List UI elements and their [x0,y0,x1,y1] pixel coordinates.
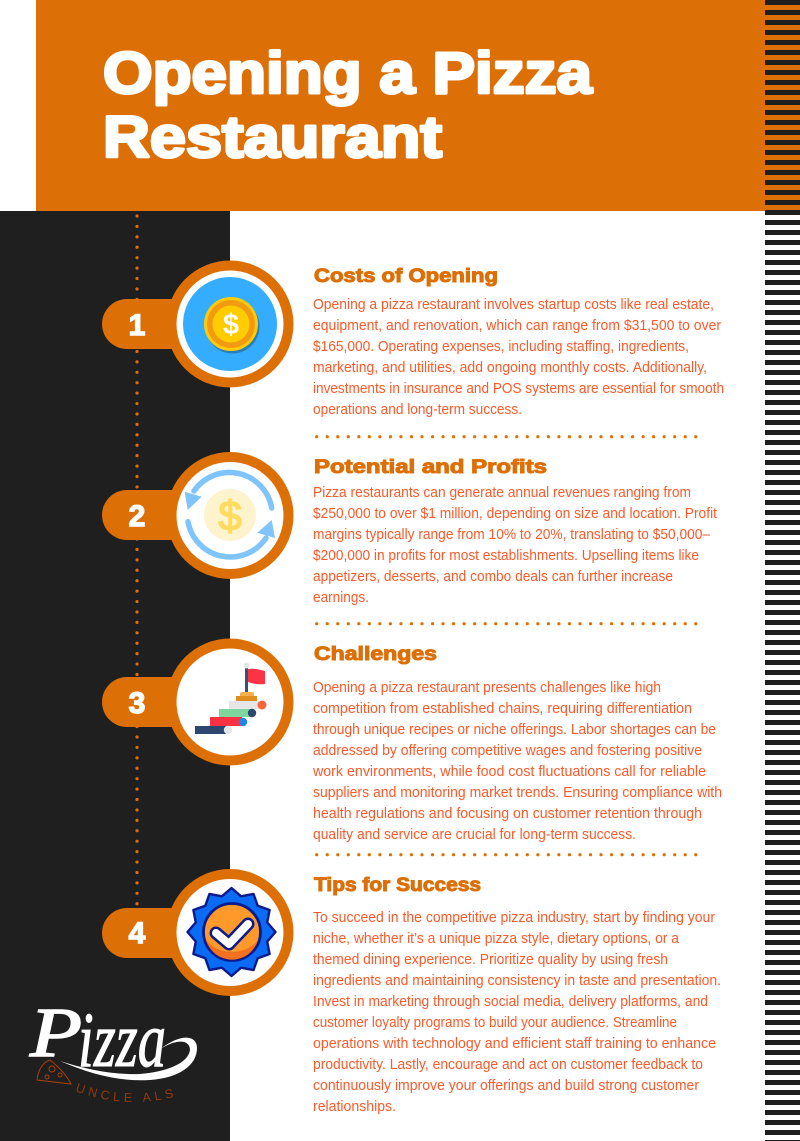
number 2: 2 [129,500,145,533]
number 1: 1 [129,309,145,342]
body text: productivity. Lastly, encourage and act on customer feedback to [313,1057,703,1073]
heading: Costs of Opening [314,266,498,287]
step 3 marker [102,638,294,766]
body text: margins typically range from 10% to 20%, translating to $50,000– [313,527,711,543]
body text: through unique recipes or niche offerings. Labor shortages can be [313,722,716,738]
body text: $165,000. Operating expenses, including staffing, ingredients, [313,339,689,355]
body text [313,910,721,1115]
icon: gold coin [183,277,277,371]
logo swoosh [60,1038,197,1080]
heading: Potential and Profits [314,457,547,478]
title: Restaurant [103,105,442,170]
number 3: 3 [129,687,145,720]
body text: addressed by offering competitive wages and fostering positive [313,743,702,759]
body text: themed dining experience. Prioritize quality by using fresh [313,952,668,968]
timeline dotted line [135,216,139,910]
icon: steps with flag [195,662,266,734]
body text: suppliers and monitoring market trends. Ensuring compliance with [313,785,722,801]
section: costs of opening [313,266,724,418]
section: potential and profits [313,457,717,606]
step 1 marker [102,260,294,388]
dark side panel [0,211,230,1141]
body text: relationships. [313,1099,396,1115]
title [103,41,593,170]
body text: appetizers, desserts, and combo deals can further increase [313,569,673,585]
step 4 marker [102,869,294,996]
body text: Pizza restaurants can generate annual revenues ranging from [313,485,691,501]
icon: verified badge [188,888,276,976]
body text: Opening a pizza restaurant involves startup costs like real estate, [313,297,714,313]
body text: equipment, and renovation, which can range from $31,500 to over [313,318,721,334]
body text: health regulations and focusing on customer retention through [313,806,702,822]
logo tagline: UNCLE ALS [76,1083,173,1102]
step 2 marker [102,452,294,579]
title: Opening a Pizza [103,41,593,106]
logo: Pizza Uncle Als [28,995,197,1102]
header band [36,0,800,211]
body text: marketing, and utilities, add ongoing monthly costs. Additionally, [313,360,707,376]
logo pizza slice [37,1060,71,1084]
icon: gold coin: $ [223,309,239,341]
body text: competition from established chains, requiring differentiation [313,701,692,717]
body text: continuously improve your offerings and build strong customer [313,1078,699,1094]
section: tips for success [313,875,721,1115]
body text: Invest in marketing through social media, delivery platforms, and [313,994,708,1010]
body text: investments in insurance and POS systems are essential for smooth [313,381,724,397]
body text: $200,000 in profits for most establishments. Upselling items like [313,548,699,564]
body text: earnings. [313,590,369,606]
icon: circular dollar arrows: $ [218,492,242,539]
logo: Pizza Uncle Als: izza [78,996,166,1083]
striped edge [765,0,800,1141]
icon: circular dollar arrows [185,472,275,557]
body text: customer loyalty programs to build your audience. Streamline [313,1015,677,1031]
heading: Tips for Success [314,875,481,896]
body text: operations with technology and efficient staff training to enhance [313,1036,716,1052]
body text [312,680,722,843]
logo: Pizza Uncle Als: P [29,995,82,1072]
heading: Challenges [314,644,437,665]
body text [313,485,717,606]
body text: To succeed in the competitive pizza industry, start by finding your [313,910,715,926]
body text: quality and service are crucial for long-term success. [313,827,636,843]
number 4: 4 [129,917,146,950]
body text: $250,000 to over $1 million, depending on size and location. Profit [313,506,717,522]
body text: operations and long-term success. [313,402,522,418]
body text: Opening a pizza restaurant presents challenges like high [313,680,661,696]
body text [313,297,724,418]
body text: work environments, while food cost fluctuations call for reliable [312,764,706,780]
body text: ingredients and maintaining consistency in taste and presentation. [313,973,721,989]
body text: niche, whether it’s a unique pizza style, dietary options, or a [313,931,680,947]
section: challenges [312,644,722,843]
